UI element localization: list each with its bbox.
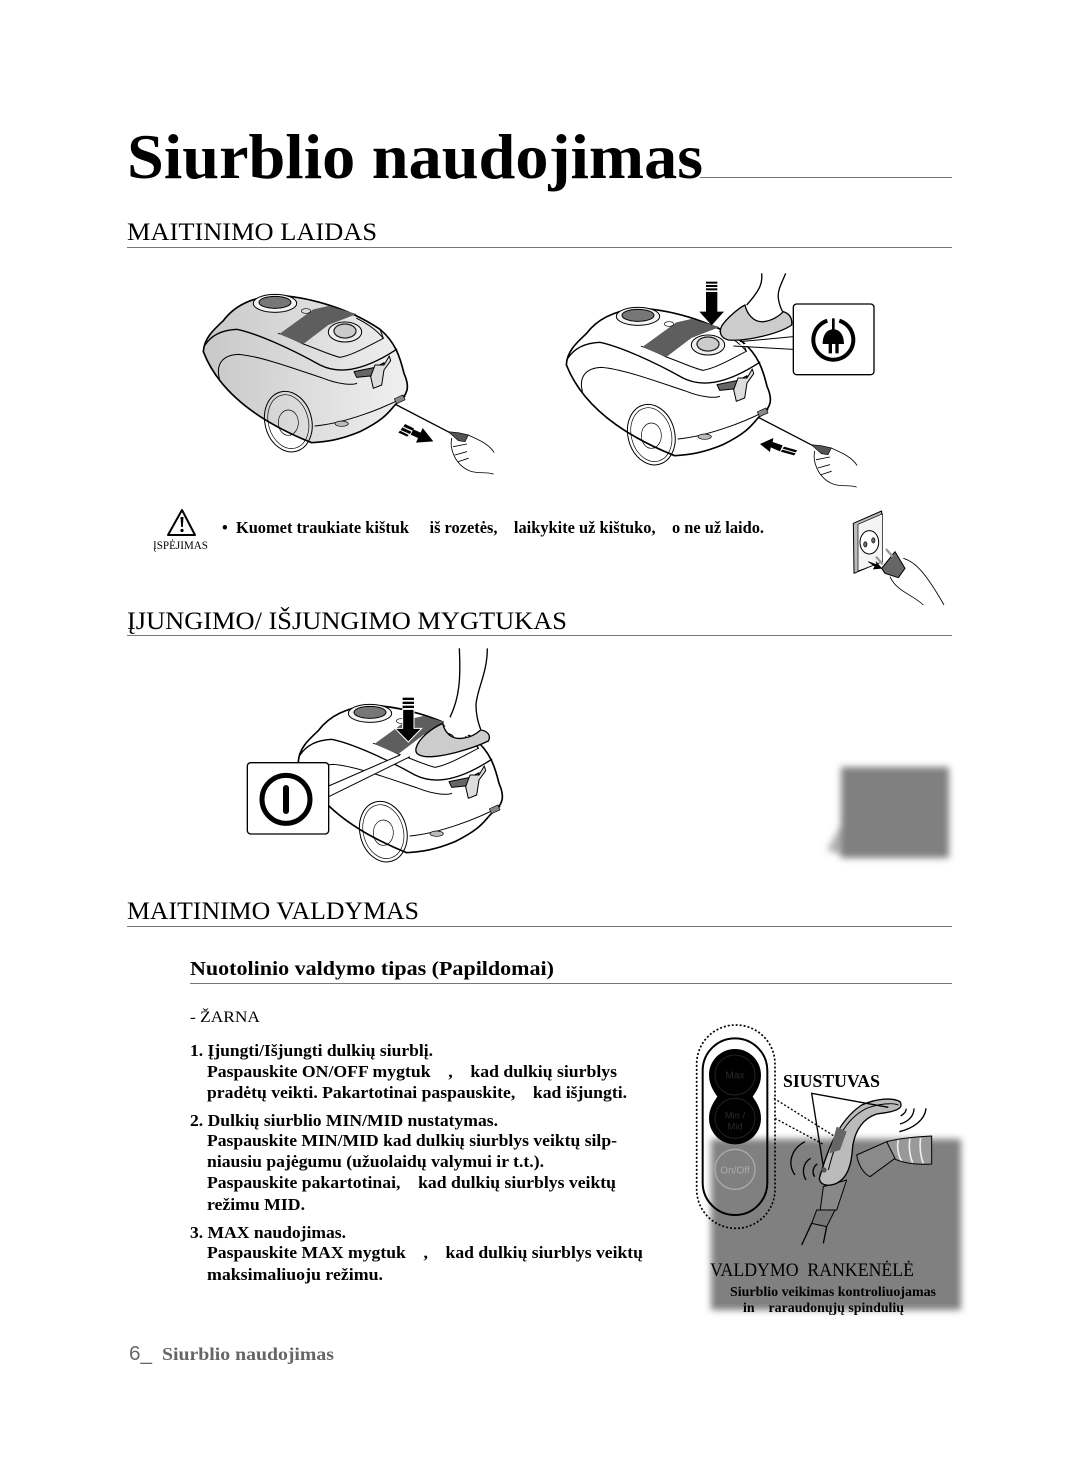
- instructions list: maksimaliuoju režimu.: [207, 1265, 383, 1284]
- remote button pill: Mid: [727, 1121, 743, 1131]
- hose: [802, 1136, 932, 1245]
- icon box: power symbol: [247, 763, 329, 834]
- gray masked panel behind handle: [711, 1139, 961, 1310]
- remote button pill: [697, 1025, 775, 1228]
- instructions list: Paspauskite ON/OFF mygtuk , kad dulkių siurblys: [207, 1062, 618, 1081]
- heading: power control: MAITINIMO VALDYMAS: [127, 898, 419, 925]
- handle: [819, 1099, 901, 1185]
- warning icon: ĮSPĖJIMAS: [153, 538, 208, 552]
- heading: on/off button: ĮJUNGIMO/ IŠJUNGIMO MYGTUKAS: [127, 606, 567, 635]
- footer: page number and section: [129, 1343, 334, 1365]
- caption: infrared control: Siurblio veikimas kontroliuojamas: [730, 1285, 937, 1300]
- foot on rewind pedal: [720, 270, 792, 340]
- footer: page number and section: Siurblio naudojimas: [162, 1344, 334, 1364]
- icon box: power plug symbol: [793, 304, 874, 375]
- footer: page number and section: 6_: [129, 1343, 153, 1365]
- instructions list: 2. Dulkių siurblio MIN/MID nustatymas.: [190, 1111, 498, 1130]
- instructions list: Paspauskite pakartotinai, kad dulkių siurblys veiktų: [207, 1173, 616, 1192]
- pointer lines: [812, 1093, 888, 1167]
- caption: infrared control: in raraudonųjų spindulių: [743, 1301, 904, 1316]
- label: transmitter: SIUSTUVAS: [783, 1071, 880, 1091]
- instructions list: [190, 1041, 643, 1284]
- callout: leader lines: [329, 750, 412, 797]
- instructions list: Paspauskite MAX mygtuk , kad dulkių siurblys veiktų: [207, 1243, 643, 1262]
- instructions list: Paspauskite MIN/MID kad dulkių siurblys veiktų silp-: [207, 1131, 617, 1150]
- instructions list: 3. MAX naudojimas.: [190, 1223, 346, 1242]
- arrow: pull direction: [398, 424, 433, 443]
- instructions list: 1. Įjungti/Išjungti dulkių siurblį.: [190, 1041, 433, 1060]
- arrow: cord rewind direction: [760, 438, 797, 455]
- illustration: pressing the cord rewind pedal: [566, 270, 874, 487]
- remote button pill: On/Off: [720, 1165, 750, 1176]
- instructions list: pradėtų veikti. Pakartotinai paspauskite, kad išjungti.: [207, 1083, 627, 1102]
- remote button pill: Min /: [725, 1110, 746, 1120]
- illustration: unplugging from socket: [853, 511, 944, 605]
- arrow: press down: [395, 698, 422, 742]
- subheading: remote control type: Nuotolinio valdymo tipas (Papildomai): [190, 958, 554, 980]
- illustration: pulling the cord out: [203, 294, 494, 474]
- gray masked block: [827, 767, 949, 858]
- illustration: pressing the power pedal: [247, 647, 502, 867]
- signal waves: [791, 1108, 926, 1180]
- instructions list: niausiu pajėgumu (užuolaidų valymui ir t.t.).: [207, 1152, 544, 1171]
- title: Siurblio naudojimas: [127, 122, 703, 192]
- instructions list: režimu MID.: [207, 1195, 305, 1214]
- callout: leader lines: [737, 336, 793, 349]
- label: hose: - ŽARNA: [190, 1009, 261, 1026]
- warning icon: [153, 510, 208, 552]
- label: control handle: VALDYMO RANKENĖLĖ: [710, 1260, 914, 1281]
- foot on power pedal: [416, 647, 489, 757]
- caption: infrared control: [730, 1285, 937, 1316]
- heading: maitinimo laidas: MAITINIMO LAIDAS: [127, 219, 377, 246]
- illustration: control handle: [697, 1025, 932, 1245]
- remote button pill: Max: [726, 1070, 744, 1081]
- arrow: press down: [699, 282, 724, 325]
- warning text: • Kuomet traukiate kištuk iš rozetės, laikykite už kištuko, o ne už laido.: [222, 518, 764, 537]
